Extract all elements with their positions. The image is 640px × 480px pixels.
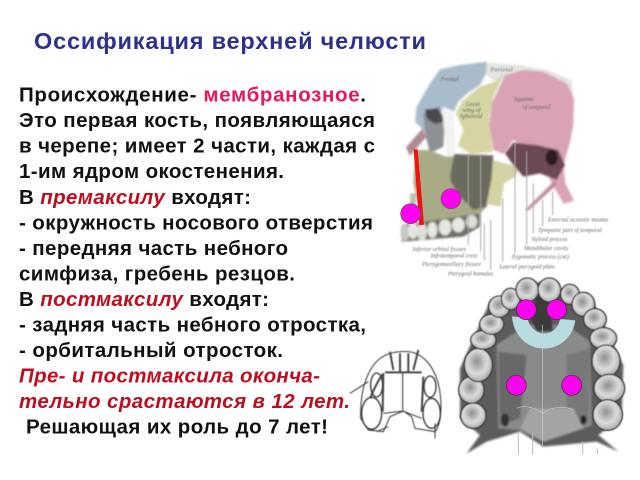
skull labels: Pterygoid hamulus	[447, 272, 494, 278]
line: first bone: Это первая кость, появляющаяся	[19, 109, 375, 132]
skull labels: Tympanic part of temporal	[538, 227, 602, 234]
illustration: palate seen from below	[459, 278, 625, 454]
line: symphysis: симфиза, гребень резцов.	[19, 262, 295, 286]
suture lines	[517, 325, 573, 445]
title: Оссификация верхней челюсти	[34, 28, 426, 54]
line: two parts: в черепе; имеет 2 части, каждая с	[19, 134, 375, 158]
skull labels: Squama	[514, 97, 533, 103]
line: one nucleus: 1-им ядром окостенения.	[19, 160, 284, 183]
leader lines	[518, 432, 597, 454]
line: anterior palate: - передняя часть небного	[19, 237, 288, 260]
text block: description of ossification	[19, 84, 375, 438]
line: posterior palatine: - задняя часть небного отростка,	[19, 314, 366, 336]
skull labels	[412, 67, 609, 278]
skull labels: Pterygomaxillary fissure	[421, 261, 481, 268]
illustration: lateral skull	[400, 62, 609, 278]
ossification point: rear right	[562, 375, 582, 395]
skull labels: wing of	[463, 107, 482, 114]
skull labels: Styloid process	[531, 237, 568, 243]
anatomical leader lines	[468, 143, 553, 270]
red line: premaxilla boundary	[414, 149, 424, 225]
line: premaxilla heading: В премаксилу входят:	[19, 186, 251, 209]
skull labels: of temporal	[523, 104, 551, 111]
illustration: small palate sketch	[350, 350, 441, 438]
skull labels: Frontal	[440, 77, 459, 83]
ossification point: postmaxilla	[441, 189, 461, 209]
line: origin: Происхождение- мембранозное.	[19, 84, 366, 106]
skull labels: Mandibular cavity	[523, 246, 569, 252]
teeth	[459, 278, 625, 430]
line: nasal aperture: - окружность носового отверстия	[19, 212, 373, 234]
ossification point: premaxilla	[401, 204, 421, 224]
skull labels: Sphenoid	[460, 114, 482, 120]
skull labels: Infratemporal crest	[430, 252, 477, 259]
skull labels: Zygomatic process (cut)	[511, 253, 569, 260]
ossification point: front right	[547, 300, 567, 320]
skull labels: Lateral pterygoid plate	[498, 264, 555, 270]
skull labels: Parietal	[490, 67, 513, 73]
skull labels: External acoustic meatus	[547, 218, 609, 224]
premaxilla highlighted arc	[512, 316, 575, 349]
line: decisive role: Решающая их роль до 7 лет!	[26, 416, 328, 438]
skull labels: Great	[466, 102, 480, 108]
line: orbital process: - орбитальный отросток.	[19, 339, 283, 362]
skull labels: Inferior orbital fissure	[412, 246, 467, 253]
ossification point: front left	[516, 300, 536, 320]
ossification point: rear left	[506, 375, 526, 395]
line: postmaxilla heading: В постмаксилу входят:	[19, 288, 269, 311]
line: fusion age: тельно срастаются в 12 лет.	[19, 390, 350, 413]
line: fusion statement: Пре- и постмаксила оконча-	[19, 364, 320, 388]
